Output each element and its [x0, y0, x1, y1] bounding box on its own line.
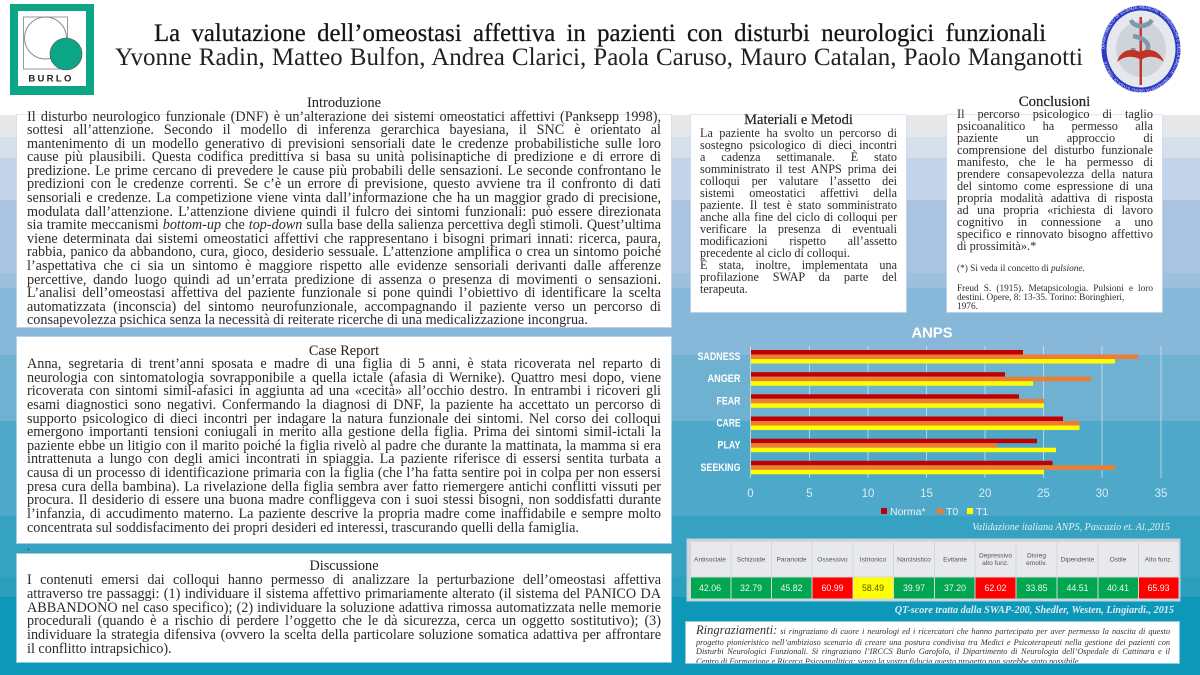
text block: materiali e metodi: precedente al ciclo di colloqui. — [700, 246, 850, 260]
table header: alto funz. — [982, 560, 1009, 567]
text block: discussione: attraverso tre passaggi: (1) individuare il sistema affettivo primariamente alterato (il sistema del PANICO DA — [27, 586, 661, 602]
table values: 62.02 — [984, 583, 1007, 593]
text block: conclusioni: del sintomo come espressione di una — [957, 179, 1153, 193]
table header: Istrionico — [860, 556, 887, 564]
logo: Burlo: BURLO — [28, 74, 74, 84]
bars: fear — [751, 394, 1044, 408]
table header: Schizoide — [737, 556, 766, 564]
heading: materiali e metodi: Materiali e Metodi — [744, 112, 853, 128]
text block: ringraziamenti: Ringraziamenti: si ringraziano di cuore i neurologi ed i ricercatori che hanno partecipato per aver permesso la nascita di questo — [696, 623, 1170, 637]
text block: introduzione: viene determinata dai sistemi omeostatici affettivi che rappresentano i bisogni primari innati: ricerca, paura, — [27, 231, 661, 247]
axis labels: 15 — [920, 488, 933, 500]
chart title: ANPS — [911, 326, 953, 342]
text block: materiali e metodi: modificazioni rispetto all’assetto — [700, 234, 897, 248]
text block: conclusioni: di prossimità».* — [957, 239, 1036, 253]
text block: materiali e metodi — [700, 126, 897, 296]
text block: materiali e metodi: profilazione SWAP da parte del — [700, 270, 897, 284]
text block: conclusioni: propria modalità adattiva di risposta — [957, 191, 1153, 205]
text block: materiali e metodi: terapeuta. — [700, 282, 748, 296]
text block: introduzione: sottesi all’attenzione. Secondo il modello di inferenza gerarchica bayesiana, il SNC è orientato al — [27, 122, 661, 138]
table values: 44.51 — [1066, 583, 1089, 593]
table values: 39.97 — [903, 583, 925, 593]
text block: case report: intrattenuta a lungo con degli amici incontrati in spiaggia. La paziente riferisce di essersi sentita turbata a — [27, 451, 661, 467]
text block: discussione: ABBANDONO nel caso specifico); (2) individuare la soluzione adattiva rimossa automatizzata nelle memorie — [27, 600, 661, 616]
reference: destini. Opere, 8: 13-35. Torino: Boringhieri, — [957, 293, 1124, 303]
logo: university crest: DIPARTIMENTO DI SCIENZE MEDICHE CHIRURGICHE E DELLA SALUTE · UNIVERSITÀ DEGLI STUDI DI TRIESTE — [1102, 6, 1180, 92]
legend: T0 — [946, 506, 958, 518]
text block: conclusioni: manifesto, che le ha permesso di — [957, 155, 1153, 169]
text block: materiali e metodi: a cadenza settimanale. È stato — [700, 150, 897, 164]
text block: conclusioni: prendere consapevolezza della natura — [957, 167, 1153, 181]
table header: Evitante — [943, 556, 967, 564]
text block: introduzione: predizioni con le credenze correnti. Se c’è un errore di previsione, questo avviene tra il confronto di dati — [27, 176, 661, 192]
table values: 65.93 — [1147, 583, 1170, 593]
bar chart: ANPS — [698, 326, 1167, 518]
text block: conclusioni: Il percorso psicologico di taglio — [957, 107, 1153, 121]
text block: case report: neurologia con sintomatologia sovrapponibile a quella ictale (afasia di Wernike). Quattro mesi dopo, viene — [27, 370, 661, 386]
panel: ringraziamenti — [686, 622, 1179, 663]
text block: discussione — [27, 572, 661, 657]
table: SWAP scores — [686, 538, 1180, 602]
bars: sadness — [751, 350, 1138, 364]
table values: 33.85 — [1025, 583, 1048, 593]
text block: introduzione: cause più plausibili. Questa codifica predittiva si basa su unità polisinaptiche di predizione e di errore di — [27, 149, 661, 165]
category labels: CARE — [716, 418, 740, 430]
text block: materiali e metodi: colloqui per valutare l’assetto dei — [700, 174, 897, 188]
chart source note: Validazione italiana ANPS, Pascazio et. Al.,2015 — [972, 522, 1170, 533]
text block: case report: ricoverata con sintomi simil-afasici in aggiunta ad una «cecità» all’occhio destro. In entrambi i ricoveri gli — [27, 383, 661, 399]
text block: conclusioni: comprensione del disturbo funzionale — [957, 143, 1153, 157]
panel: discussione — [17, 554, 671, 662]
table header: emotiv. — [1026, 560, 1047, 567]
text block: materiali e metodi: paziente. Il test è stato somministrato — [700, 198, 897, 212]
axis labels: 10 — [862, 488, 874, 500]
table values — [691, 578, 1178, 598]
text block: discussione: individuare la strategia difensiva (ovvero la scelta della particolare soluzione somatica adattiva per affrontare — [27, 627, 661, 643]
panel: case report — [17, 337, 671, 543]
legend: Norma* — [890, 506, 926, 518]
text block: case report: esami diagnostici sono negativi. Confermando la diagnosi di DNF, la paziente ha accettato un percorso di — [27, 397, 661, 413]
bars: care — [751, 416, 1080, 430]
table source note: QT-score tratta dalla SWAP-200, Shedler, Westen, Lingiardi., 2015 — [895, 605, 1174, 616]
panel background — [947, 115, 1162, 312]
text block: introduzione: percettive, dando luogo quindi ad un’errata predizione di assenza o presenza di movimenti o sensazioni. — [27, 272, 661, 288]
text block: discussione: il conflitto intrapsichico). — [27, 641, 172, 657]
table header: Ostile — [1110, 556, 1127, 564]
text block: introduzione: mantenimento di un modello generativo di previsioni sensoriali date le credenze probabilistiche sulle loro — [27, 136, 661, 152]
table header: Disreg — [1027, 552, 1046, 560]
axis labels: 30 — [1096, 488, 1108, 500]
text block: introduzione: automatizzata (inconscia) del sintomo neurofunzionale, accompagnando il paziente verso un percorso di — [27, 299, 661, 315]
table values: 58.49 — [862, 583, 884, 593]
stray dot: . — [27, 539, 30, 553]
text block: materiali e metodi: sistemi omeostatici affettivi della — [700, 186, 897, 200]
text block: case report: concentrata sul soddisfacimento dei propri desideri ed interessi, trascurando quelli della famiglia. — [27, 520, 579, 536]
text block: discussione: procedurali (quando è a rischio di perdere l’oggetto che le dà sicurezza, cerca un oggetto sostitutivo); (3) — [27, 613, 661, 629]
panel background — [17, 115, 671, 327]
text block: introduzione: rabbia, panico da abbandono, cura, gioco, desiderio sessuale. L’attenzione amplifica o crea un sintomo poiché — [27, 244, 661, 260]
table header: Paranoide — [776, 556, 807, 564]
table values: 40.41 — [1107, 583, 1129, 593]
category labels: ANGER — [708, 373, 741, 385]
text block: introduzione: modulata dall’attenzione. L’attenzione diviene quindi il fulcro dei sintomi funzionali: può essere direzionata — [27, 204, 661, 220]
text block: introduzione: sensoriali e credenze. La competizione viene vinta dall’informazione che ha un maggior grado di precisione, — [27, 190, 661, 206]
panel: conclusioni — [946, 94, 1163, 313]
table header: Narcisistico — [897, 556, 931, 564]
axis labels: 25 — [1037, 488, 1050, 500]
category labels — [698, 351, 741, 474]
text block: case report: supporto psicologico di dieci incontri per indagare la natura funzionale dei sintomi. Nel corso dei colloqui — [27, 410, 661, 426]
text block: ringraziamenti: Disturbi Neurologici Funzionali. Si ringraziano l’IRCCS Burlo Garofolo, il Dipartimento di Neurologia dell’Ospedale di Cattinara e il — [696, 647, 1170, 656]
text block: materiali e metodi: La paziente ha svolto un percorso di — [700, 126, 897, 140]
heading: conclusioni: Conclusioni — [1019, 94, 1090, 110]
text block: case report: causa di un processo di identificazione primaria con la figlia (che l’ha fatta sentire poi in colpa per non essersi — [27, 465, 661, 481]
text block: conclusioni: specifico e rinnovato bisogno affettivo — [957, 227, 1153, 241]
text block: introduzione — [27, 108, 661, 328]
text block: ringraziamenti: progetto pionieristico nell’ambizioso scenario di creare una postura condivisa tra Medici e Psicoterapeuti nella gestione dei pazienti con — [696, 638, 1170, 647]
text block: conclusioni: ad una propria «richiesta di lavoro — [957, 203, 1153, 217]
panel: introduzione — [16, 95, 672, 328]
text block: conclusioni: cognitivo in connessione a uno — [957, 215, 1153, 229]
title: La valutazione dell’omeostasi affettiva in pazienti con disturbi neurologici funzionali — [154, 20, 1046, 47]
table header: Ossessivo — [817, 556, 848, 564]
table values: 45.82 — [780, 583, 803, 593]
logo: Burlo — [10, 4, 94, 95]
axis labels — [747, 488, 1167, 500]
text block: conclusioni: paziente un approccio di — [957, 131, 1153, 145]
authors: Yvonne Radin, Matteo Bulfon, Andrea Clarici, Paola Caruso, Mauro Catalan, Paolo Manganotti — [115, 44, 1083, 71]
text block: materiali e metodi: È stata, inoltre, implementata una — [700, 258, 897, 272]
table values: 42.06 — [699, 583, 721, 593]
text block: materiali e metodi: sostegno psicologico di dieci incontri — [700, 138, 897, 152]
text block: introduzione: consapevolezza psichica senza la necessità di reiterate ricerche di una medicalizzazione incongrua. — [27, 312, 588, 328]
axis labels: 20 — [979, 488, 991, 500]
panel: materiali e metodi — [691, 115, 906, 312]
table header: Alto funz. — [1145, 556, 1172, 564]
text block: introduzione: Il disturbo neurologico funzionale (DNF) è un’alterazione dei sistemi omeostatici affettivi (Panksepp 1998), — [27, 108, 661, 124]
legend — [881, 506, 988, 518]
table values: 32.79 — [740, 583, 762, 593]
heading: case report: Case Report — [309, 343, 379, 359]
text block: materiali e metodi: somministrato il test ANPS prima dei — [700, 162, 897, 176]
heading: discussione: Discussione — [309, 558, 379, 574]
text block: case report: procura. Il desiderio di essere una buona madre confliggeva con i suoi stessi bisogni, non soddisfatti durante — [27, 492, 661, 508]
reference: 1976. — [957, 302, 978, 312]
text block: conclusioni — [957, 107, 1153, 253]
text block: discussione: I contenuti emersi dai colloqui hanno permesso di analizzare la perturbazione dell’omeostasi affettiva — [27, 572, 661, 588]
table header: Depressivo — [979, 552, 1012, 560]
text block: case report: emergono importanti tensioni coniugali in merito alla gestione della figlia. Prima dei sintomi simil-ictali la — [27, 424, 661, 440]
text block: case report: Anna, segretaria di trent’anni sposata e madre di una figlia di 5 anni, è stata ricoverata nel reparto di — [27, 356, 661, 372]
text block: conclusioni: psicoanalitico ha permesso alla — [957, 119, 1153, 133]
category labels: SEEKING — [700, 462, 740, 474]
text block: introduzione: sia tramite meccanismi bottom-up che top-down sulla base della salienza percettiva degli stimoli. Quest’ultima — [27, 217, 661, 233]
table header — [691, 542, 1178, 576]
text block: ringraziamenti — [696, 623, 1170, 663]
text block: case report: presa cura della bambina). La rivelazione della figlia sembra aver fatto riemergere antichi conflitti vissuti per — [27, 479, 661, 495]
text block: introduzione: L’analisi dell’omeostasi affettiva del paziente funzionale si pone quindi l’obiettivo di identificare la scelta — [27, 285, 661, 301]
heading: introduzione: Introduzione — [307, 95, 381, 111]
text block: introduzione: predizione. Le prime cercano di prevedere le cause più probabili delle sensazioni. Le seconde confrontano le — [27, 163, 661, 179]
category labels: PLAY — [718, 440, 741, 452]
reference — [957, 284, 1153, 312]
axis labels: 5 — [806, 488, 813, 500]
table header: Antisociale — [694, 556, 726, 564]
table values: 60.99 — [821, 583, 844, 593]
legend: T1 — [976, 506, 988, 518]
bars: seeking — [751, 461, 1115, 474]
text block: materiali e metodi: anche alla fine del ciclo di colloqui per — [700, 210, 897, 224]
table values: 37.20 — [944, 583, 966, 593]
axis labels: 35 — [1155, 488, 1167, 500]
table header: Dipendente — [1061, 556, 1095, 564]
text block: case report: l’infanzia, di accudimento materno. La paziente descrive la propria madre come inaffidabile e sempre molto — [27, 506, 661, 522]
text block: case report — [27, 356, 661, 536]
footnote: (*) Si veda il concetto di pulsione. — [957, 264, 1085, 274]
bars: play — [751, 439, 1056, 452]
bars: anger — [751, 372, 1091, 386]
text block: case report: paziente ebbe un litigio con il marito poiché la figlia rivelò al padre che durante la mattinata, la mamma si era — [27, 438, 661, 454]
text block: introduzione: l’aspettativa che ci sia un sintomo è maggiore rispetto alle evidenze sensoriali derivanti dalle afferenze — [27, 258, 661, 274]
reference: Freud S. (1915). Metapsicologia. Pulsioni e loro — [957, 284, 1153, 294]
category labels: SADNESS — [698, 351, 740, 363]
text block: materiali e metodi: verificare la presenza di eventuali — [700, 222, 897, 236]
axis labels: 0 — [747, 488, 754, 500]
category labels: FEAR — [716, 395, 741, 407]
